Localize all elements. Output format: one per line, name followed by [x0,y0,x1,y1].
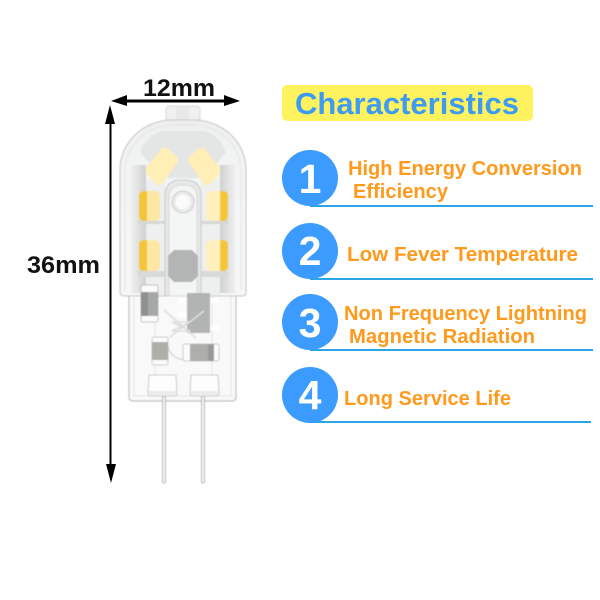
component A [141,285,158,322]
X pattern [164,310,204,338]
left terminal [148,375,177,396]
bulb top nub [166,106,200,120]
item 1 rule [310,205,593,207]
bulb lower body [129,290,236,401]
component C [152,337,168,365]
item 4 rule [310,421,591,423]
LED: lower right [206,240,228,271]
LED: upper right [206,191,228,221]
item 2 number: 2 [299,228,321,274]
component D [183,344,219,361]
item 4 text: Long Service Life [344,388,511,410]
item 1 [282,150,593,207]
LED bulb illustration [120,106,246,483]
bulb upper dome [120,120,246,296]
item 4 badge [282,367,338,423]
central channel [165,180,201,296]
width label: 12mm [143,75,215,102]
item 1 badge [282,150,338,206]
item 2 text: Low Fever Temperature [347,244,578,266]
item 4 [282,367,591,423]
driver chip [178,293,219,333]
item 2 rule [310,278,593,280]
item 2 badge [282,223,338,279]
item 3 badge [282,294,338,350]
lower body rails [134,297,231,396]
item 3 text: Non Frequency Lightning [344,303,587,325]
item 3 rule [310,349,593,351]
title badge: Characteristics [295,86,519,121]
channel circle [172,191,194,213]
inner dome shade [140,131,226,178]
item 4 number: 4 [299,372,322,418]
octagon chip [168,250,198,282]
width dimension arrow [111,95,240,106]
left pin [162,396,166,483]
height dimension arrow [105,105,116,483]
item 1 number: 1 [299,156,321,202]
item 2 [282,223,593,280]
LED: upper left [139,191,160,221]
item 3 text: Magnetic Radiation [349,326,535,348]
right terminal [190,375,219,396]
LED: top left diamond [146,148,178,185]
LED: lower left [139,240,160,271]
item 1 text: High Energy Conversion [348,158,582,180]
inner grey bands [131,165,146,293]
item 1 text: Efficiency [353,181,449,203]
item 3 number: 3 [299,300,321,346]
right pin [202,396,204,483]
item 3 [282,294,593,351]
curved trace [168,346,198,360]
LED: top right diamond [188,148,220,185]
height label: 36mm [27,252,100,279]
